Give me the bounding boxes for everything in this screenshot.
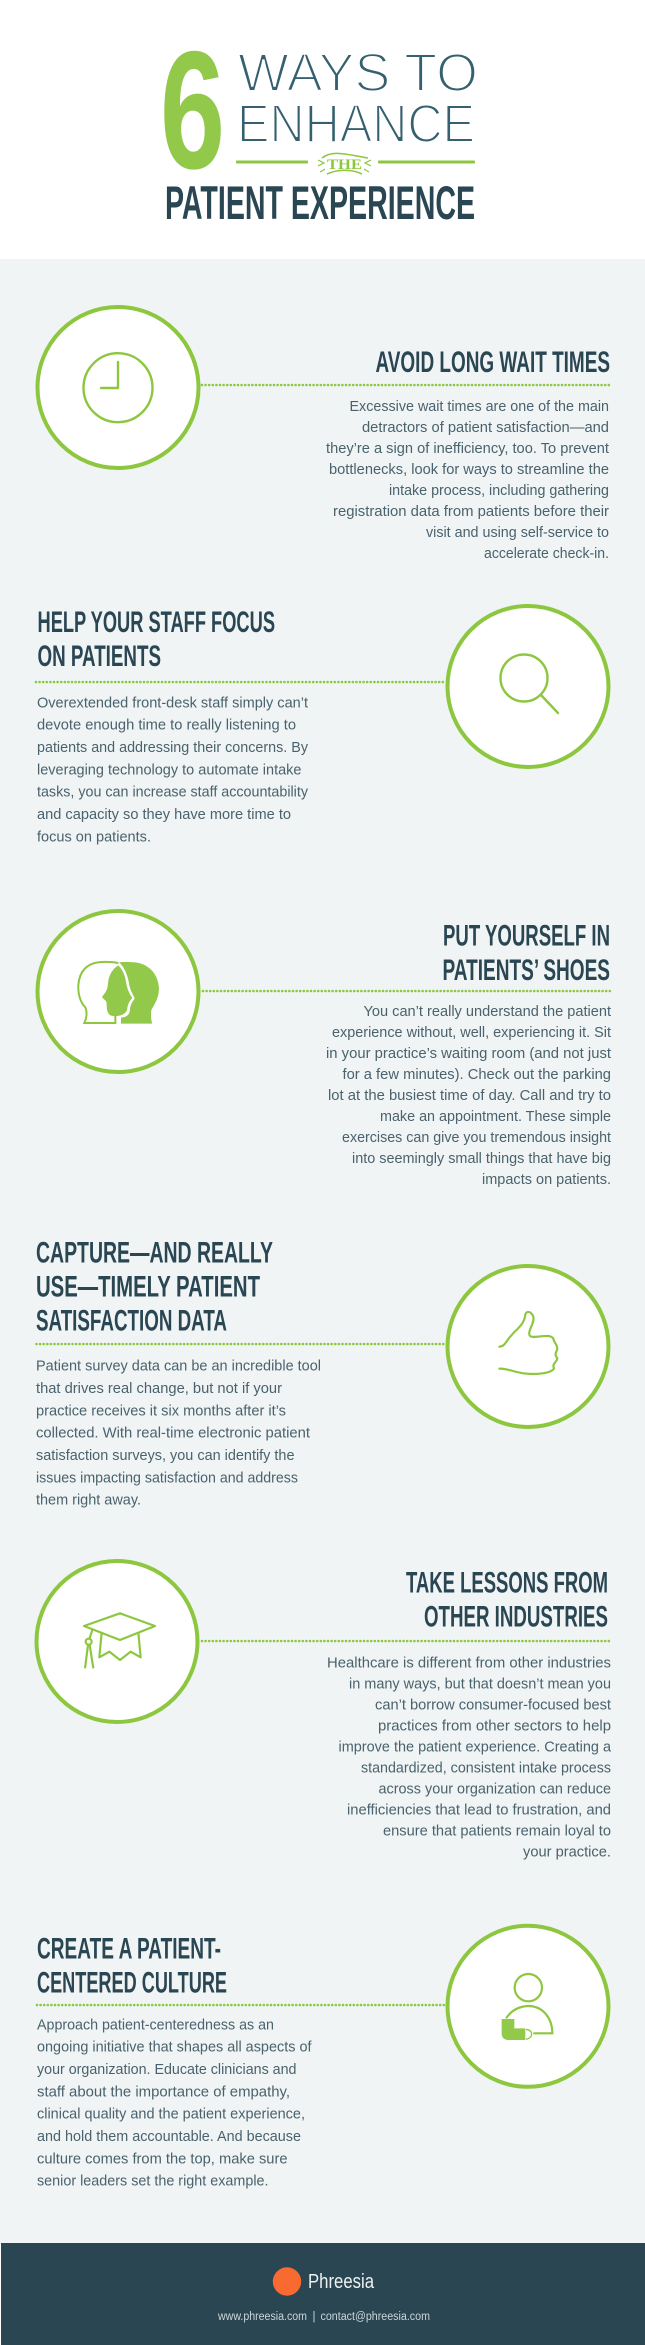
body text: impacts on patients. [482,1172,611,1188]
dotted connector [37,2004,444,2006]
body text: can’t borrow consumer-focused best [375,1698,611,1714]
body text: Patient survey data can be an incredible tool [36,1359,321,1375]
body text: detractors of patient satisfaction—and [362,420,609,436]
body text: standardized, consistent intake process [361,1761,611,1777]
body text: patients and addressing their concerns. By [37,740,309,756]
body text: Excessive wait times are one of the main [350,399,609,415]
logo mark [273,2267,301,2296]
footer [1,2243,645,2345]
heading: ON PATIENTS [38,640,161,673]
dotted connector [203,990,610,992]
heading [406,1567,608,1634]
contact line: www.phreesia.com [217,2311,307,2323]
contact line: contact@phreesia.com [320,2311,430,2323]
body text: practices from other sectors to help [378,1719,611,1735]
body text: your practice. [523,1845,611,1861]
contact line [217,2311,430,2323]
panel: help your staff focus on patients [36,606,608,845]
dotted connector [202,384,610,386]
dotted connector [36,681,444,683]
body text: collected. With real-time electronic patient [36,1426,310,1442]
body text: experience without, well, experiencing it. Sit [332,1025,611,1041]
body text: registration data from patients before their [333,504,609,520]
heading: CENTERED CULTURE [37,1966,227,1999]
icon: two heads [38,911,198,1072]
body text: bottlenecks, look for ways to streamline the [329,462,609,478]
body text: practice receives it six months after it’s [36,1403,286,1419]
ornament: THE banner [318,153,371,174]
body text: visit and using self-service to [426,525,609,541]
body text: ensure that patients remain loyal to [383,1824,611,1840]
dotted connector [202,1640,610,1642]
body text: exercises can give you tremendous insight [342,1130,611,1146]
ornament: THE banner: THE [327,157,362,173]
body text: intake process, including gathering [389,483,609,499]
contact line: | [312,2311,316,2323]
body text [37,695,309,845]
body text: Overextended front-desk staff simply can’t [37,695,308,711]
body text: across your organization can reduce [378,1782,611,1798]
icon: thumbs up [448,1266,608,1427]
body text: Healthcare is different from other industries [327,1656,611,1672]
body text: devote enough time to really listening to [37,718,296,734]
body text: they’re a sign of inefficiency, too. To prevent [326,441,609,457]
body text: them right away. [36,1493,141,1509]
body text [37,2017,312,2190]
body text: satisfaction surveys, you can identify the [36,1448,294,1464]
body text: You can’t really understand the patient [364,1004,611,1020]
body text: culture comes from the top, make sure [37,2151,288,2167]
heading: SATISFACTION DATA [36,1305,227,1338]
heading [38,606,275,673]
title block [160,16,478,229]
panel: take lessons from other industries [36,1561,612,1861]
panel: capture and use timely patient satisfaction data [36,1237,608,1509]
body text: in your practice’s waiting room (and not just [326,1046,611,1062]
body text: improve the patient experience. Creating a [338,1740,612,1756]
body text: that drives real change, but not if your [36,1381,282,1397]
body text: senior leaders set the right example. [37,2174,268,2190]
icon: magnifying glass [448,606,608,767]
footer band [1,2243,645,2345]
heading: USE—TIMELY PATIENT [36,1271,260,1304]
body text: and capacity so they have more time to [37,807,291,823]
big green numeral 6: 6 [160,16,225,204]
body text: into seemingly small things that have big [352,1151,611,1167]
right rule [378,160,475,164]
body text: lot at the busiest time of day. Call and try to [328,1088,611,1104]
heading [37,1933,227,1999]
title line: WAYS TO: WAYS TO [238,43,478,103]
body text: leveraging technology to automate intake [37,762,302,778]
panel: avoid long wait times [38,307,610,562]
heading [36,1237,273,1338]
heading [442,920,610,987]
icon: person with mug [448,1926,608,2087]
body text: for a few minutes). Check out the parking [342,1067,611,1083]
icon: graduation cap [36,1561,198,1722]
logo wordmark: Phreesia [308,2271,375,2293]
body text: ongoing initiative that shapes all aspects of [37,2040,312,2056]
heading: CAPTURE—AND REALLY [36,1237,273,1270]
body text: accelerate check-in. [484,546,609,562]
left rule [236,160,308,164]
body text: make an appointment. These simple [380,1109,611,1125]
body text: tasks, you can increase staff accountability [37,785,309,801]
body text: issues impacting satisfaction and address [36,1470,298,1486]
body text: inefficiencies that lead to frustration, and [347,1803,611,1819]
body text: in many ways, but that doesn’t mean you [349,1677,611,1693]
body text: and hold them accountable. And because [37,2129,301,2145]
body text: Approach patient-centeredness as an [37,2017,274,2033]
heading: CREATE A PATIENT- [37,1933,221,1966]
body text: your organization. Educate clinicians and [37,2062,296,2078]
icon: clock [38,307,198,468]
body text [326,399,609,562]
heading: HELP YOUR STAFF FOCUS [38,606,275,639]
body text [326,1004,611,1188]
body text: staff about the importance of empathy, [37,2084,290,2100]
panel: put yourself in patients' shoes [38,911,611,1188]
body text: clinical quality and the patient experience, [37,2107,305,2123]
body text [327,1656,612,1861]
body text: focus on patients. [37,829,151,845]
dotted connector [36,1343,445,1345]
title line: ENHANCE: ENHANCE [237,94,475,154]
body text [36,1359,321,1509]
panel: create a patient-centered culture [37,1926,608,2190]
